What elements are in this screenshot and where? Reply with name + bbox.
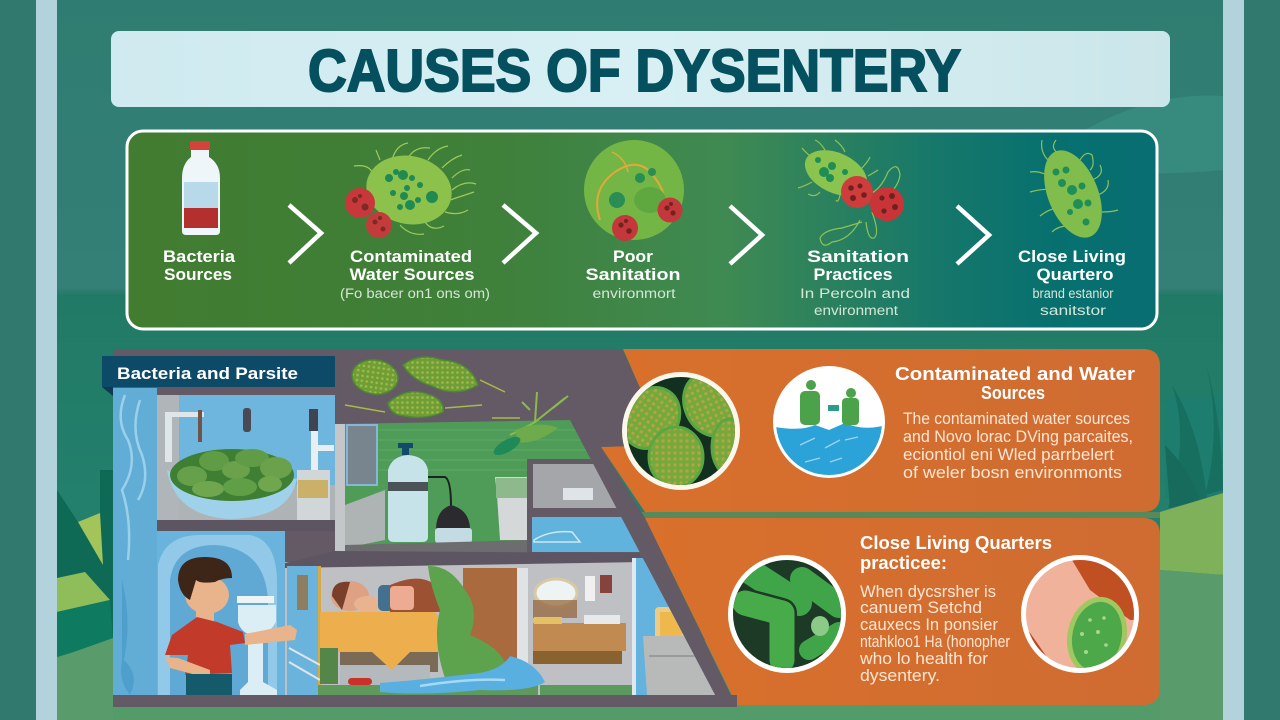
title: CAUSES OF DYSENTERY bbox=[308, 38, 961, 104]
icon: bottle bbox=[182, 141, 220, 235]
circle: people in water bbox=[773, 366, 885, 478]
icon: round microbe bbox=[584, 140, 684, 241]
label: sanitation practices bbox=[800, 247, 910, 318]
bin bbox=[495, 477, 527, 540]
text: close living quarters: canuem Setchd bbox=[860, 599, 982, 617]
laundry machine bbox=[643, 607, 722, 695]
label: sanitation practices: environment bbox=[814, 303, 898, 318]
arrow 1 bbox=[289, 205, 321, 263]
text: close living quarters: who lo health for bbox=[859, 650, 989, 668]
room: boy backdrop bbox=[157, 531, 285, 695]
boy bbox=[165, 557, 297, 695]
room: shelf divider bbox=[157, 520, 335, 531]
panel: orange close living bbox=[645, 518, 1160, 705]
circle: parasite cells bbox=[622, 372, 740, 490]
arrow 3 bbox=[730, 206, 762, 264]
label: sanitation practices: In Percoln and bbox=[800, 286, 910, 301]
bottom floor bar bbox=[113, 695, 737, 707]
label: contaminated water sources bbox=[340, 247, 490, 301]
sink bowl bbox=[167, 470, 297, 519]
pump bbox=[428, 477, 472, 543]
side room frame bbox=[527, 459, 638, 552]
water puddle bbox=[380, 656, 545, 694]
label: close living quarters: brand estanior bbox=[1032, 286, 1114, 301]
icon: rod bacterium bbox=[1030, 140, 1118, 246]
leafy greens bbox=[170, 449, 294, 501]
right blue panel bbox=[632, 558, 636, 695]
label: close living quarters bbox=[1018, 247, 1126, 318]
label: contaminated water sources: (Fo bacer on1 ons om) bbox=[340, 286, 490, 301]
label: poor sanitation: Sanitation bbox=[586, 265, 680, 284]
text: contaminated water sources bbox=[895, 363, 1135, 482]
roof bacteria bbox=[345, 357, 568, 459]
plants at bed foot bbox=[320, 648, 338, 684]
plant sprout and worm bbox=[491, 392, 568, 459]
text: contaminated water sources: Sources bbox=[981, 382, 1045, 403]
text: close living quarters: Close Living Quarters bbox=[860, 532, 1052, 553]
title banner bbox=[111, 31, 1170, 107]
house shell bbox=[113, 349, 737, 707]
banner: bacteria and parasite bbox=[102, 356, 335, 396]
panel: cutaway house bbox=[113, 349, 737, 707]
arrow 4 bbox=[957, 206, 989, 264]
text: close living quarters: When dycsrsher is bbox=[860, 583, 996, 601]
patient bbox=[331, 579, 440, 612]
label: contaminated water sources: Contaminated bbox=[350, 247, 472, 266]
label: bacteria sources: Bacteria bbox=[163, 247, 236, 266]
text: close living quarters: ntahkloo1 Ha (honopher bbox=[860, 633, 1010, 651]
banner: bacteria and parasite: Bacteria and Parsite bbox=[117, 364, 298, 383]
label: bacteria sources: Sources bbox=[164, 265, 232, 284]
label: poor sanitation: environmort bbox=[592, 286, 676, 301]
room: bedroom bbox=[285, 551, 722, 695]
left water column bbox=[113, 388, 157, 695]
text: close living quarters: dysentery. bbox=[860, 667, 940, 685]
label: sanitation practices: Practices bbox=[814, 265, 892, 284]
label: contaminated water sources: Water Sources bbox=[350, 265, 474, 284]
green floor bbox=[540, 685, 635, 695]
label: bacteria sources bbox=[163, 247, 236, 284]
icon: microbe with two parasites bbox=[798, 140, 904, 245]
bed blanket bbox=[340, 652, 438, 672]
side strip: left bbox=[36, 0, 57, 720]
green blanket bbox=[428, 566, 507, 679]
basin pedestal bbox=[237, 596, 277, 695]
room: green middle bbox=[335, 420, 657, 554]
text: close living quarters bbox=[859, 532, 1052, 685]
label: close living quarters: Quartero bbox=[1036, 265, 1114, 284]
text: contaminated water sources: The contaminated water sources bbox=[903, 410, 1130, 428]
cabinet bbox=[533, 575, 626, 664]
panel: orange contaminated water bbox=[601, 349, 1160, 512]
text: close living quarters: practicee: bbox=[860, 552, 947, 573]
text: contaminated water sources: and Novo lorac DVing parcaites, bbox=[903, 428, 1133, 446]
label: poor sanitation bbox=[586, 247, 680, 301]
text: contaminated water sources: Contaminated and Water bbox=[895, 363, 1135, 384]
water filter tank bbox=[388, 443, 428, 542]
label: close living quarters: Close Living bbox=[1018, 247, 1126, 266]
circle: face with microbe bbox=[1020, 555, 1145, 678]
icon: bacterium with parasites 1 bbox=[345, 143, 476, 238]
text: close living quarters: cauxecs In ponsier bbox=[860, 616, 999, 634]
side strip: right bbox=[1223, 0, 1244, 720]
arrow 2 bbox=[503, 205, 536, 263]
door bbox=[463, 568, 517, 662]
label: close living quarters: sanitstor bbox=[1040, 303, 1107, 318]
room: sink bbox=[157, 395, 335, 520]
label: sanitation practices: Sanitation bbox=[807, 247, 909, 266]
text: contaminated water sources: eciontiol eni Wled parrbelert bbox=[903, 446, 1114, 464]
panel: causes flow bbox=[127, 131, 1157, 329]
circle: green rod bacteria bbox=[725, 555, 850, 675]
text: contaminated water sources: of weler bosn environmonts bbox=[903, 464, 1122, 482]
label: poor sanitation: Poor bbox=[613, 247, 653, 266]
